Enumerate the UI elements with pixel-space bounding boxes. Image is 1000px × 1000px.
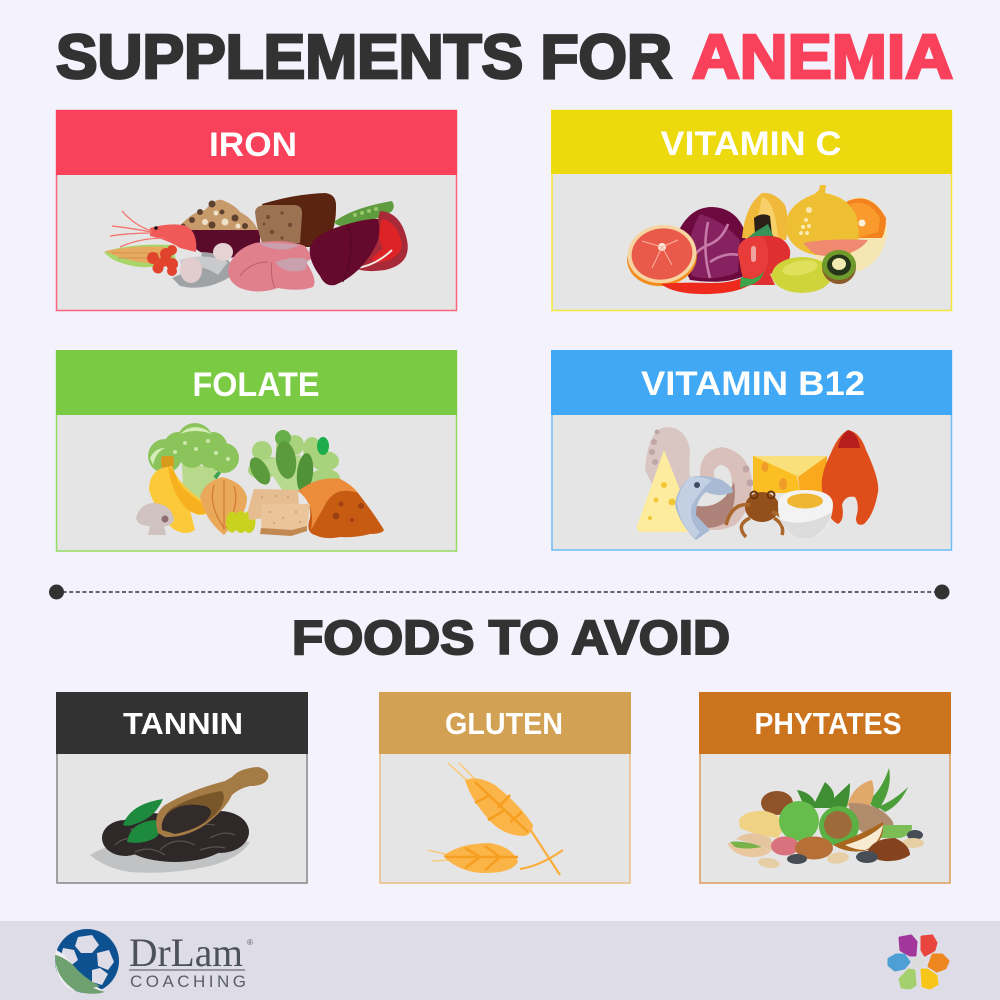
vitamin b12 header bar xyxy=(551,350,952,415)
tannin heading: TANNIN xyxy=(123,706,243,741)
folate header bar xyxy=(56,350,457,415)
illustration: tea leaves and scoop xyxy=(90,767,268,873)
illustration: b12-rich foods xyxy=(637,427,878,540)
panel: vitamin b12 xyxy=(551,350,952,550)
logo tagline: COACHING xyxy=(130,972,246,991)
icon: colourful flower xyxy=(889,936,948,988)
title: SUPPLEMENTS FOR xyxy=(56,23,672,92)
logo emblem xyxy=(55,929,119,994)
phytates header bar xyxy=(699,692,951,754)
panel: gluten xyxy=(379,692,631,883)
folate heading: FOLATE xyxy=(192,366,320,404)
vitamin c header bar xyxy=(551,110,952,174)
iron header bar xyxy=(56,110,457,175)
illustration: folate-rich foods xyxy=(136,423,384,538)
panel: tannin xyxy=(56,692,308,883)
vitamin b12 heading: VITAMIN B12 xyxy=(641,365,865,403)
illustration: citrus fruits and peppers xyxy=(623,185,887,294)
gluten header bar xyxy=(379,692,631,754)
panel: iron xyxy=(56,110,457,310)
title xyxy=(56,23,953,92)
illustration: wheat ears xyxy=(428,763,563,875)
iron heading: IRON xyxy=(209,126,297,164)
logo: DrLam Coaching xyxy=(55,929,253,994)
panel: phytates xyxy=(699,692,951,883)
footer bar xyxy=(0,921,1000,1000)
phytates heading: PHYTATES xyxy=(754,706,902,741)
panel: vitamin c xyxy=(551,110,952,310)
vitamin c heading: VITAMIN C xyxy=(660,125,842,163)
divider xyxy=(49,584,950,600)
registered mark: ® xyxy=(247,938,253,947)
logo rule xyxy=(129,970,245,971)
logo wordmark: DrLam xyxy=(129,930,243,975)
panel: folate xyxy=(56,350,457,551)
gluten heading: GLUTEN xyxy=(445,706,563,741)
illustration: iron-rich foods xyxy=(104,193,408,292)
illustration: nuts and seeds xyxy=(727,768,924,869)
heading: foods to avoid: FOODS TO AVOID xyxy=(292,612,730,665)
tannin header bar xyxy=(56,692,308,754)
title: ANEMIA xyxy=(692,23,953,92)
